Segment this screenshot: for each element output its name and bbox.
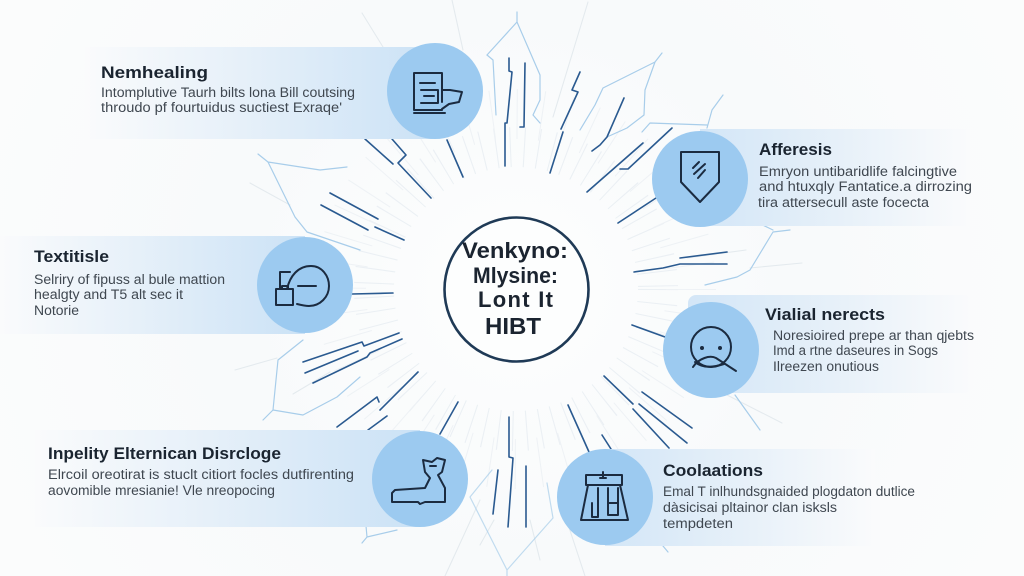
panel: Inpelity Elternican Disrcloge — [35, 430, 468, 527]
body text: throudo pf fourtuidus suctiest Exraqe' — [101, 100, 342, 115]
icon circle — [663, 302, 759, 398]
icon circle — [557, 449, 653, 545]
body text: tempdeten — [663, 516, 733, 531]
icon: block figure — [392, 458, 445, 504]
body text — [101, 85, 355, 115]
icon: market building — [581, 472, 628, 520]
body text: Imd a rtne daseures in Sogs — [773, 343, 938, 358]
body text: tira attersecull aste focecta — [758, 195, 930, 210]
center circle title: Mlysine: — [473, 263, 558, 288]
body text: Emal T inlhundsgnaided plogdaton dutlice — [663, 484, 915, 499]
panel: Afferesis — [652, 129, 972, 227]
panel: Nemhealing — [85, 43, 483, 139]
panel band — [85, 47, 435, 139]
heading: Coolaations — [663, 462, 763, 480]
icon: tablet and hand — [414, 73, 462, 113]
body text — [34, 272, 225, 318]
body text: Elrcoil oreotirat is stuclt citiort focles dutfirenting — [48, 467, 354, 482]
body text — [48, 467, 354, 498]
body text: Intomplutive Taurh bilts lona Bill coutsing — [101, 85, 355, 100]
body text: Notorie — [34, 303, 79, 318]
icon circle — [387, 43, 483, 139]
center circle title — [444, 218, 588, 362]
icon: face — [691, 327, 736, 371]
panel band — [35, 430, 420, 527]
body text: dàsicisai pltainor clan isksls — [663, 500, 837, 515]
heading: Textitisle — [34, 248, 109, 266]
icon circle — [257, 237, 353, 333]
heading: Afferesis — [759, 141, 832, 159]
icon: bag and circle — [276, 266, 329, 306]
panel band — [700, 129, 970, 226]
panel band — [0, 236, 305, 334]
center circle title: Lont It — [478, 287, 554, 312]
body text: aovomible mresianie! Vle nreopocing — [48, 483, 275, 498]
heading: Inpelity Elternican Disrcloge — [48, 445, 281, 463]
light blue vein lines — [258, 12, 790, 576]
panel band — [688, 295, 973, 393]
icon circle — [372, 431, 468, 527]
center circle title: HIBT — [485, 313, 541, 339]
body text — [663, 484, 915, 531]
body text: Selriry of fipuss al bule mattion — [34, 272, 225, 287]
body text: Noresioired prepe ar than qjebts — [773, 328, 974, 343]
dark blue circuit lines — [303, 58, 727, 527]
center circle title: Venkyno: — [462, 238, 568, 263]
panel band — [605, 449, 875, 546]
icon: shield — [681, 152, 719, 202]
body text: healgty and T5 alt sec it — [34, 287, 183, 302]
body text — [758, 164, 972, 210]
panel: Vialial nerects — [663, 295, 974, 398]
panel: Coolaations — [557, 449, 915, 546]
body text: and htuxqly Fantatice.a dirrozing — [759, 179, 972, 194]
heading: Vialial nerects — [765, 306, 885, 324]
body text: Emryon untibaridlife falcingtive — [759, 164, 957, 179]
heading: Nemhealing — [101, 64, 208, 82]
icon circle — [652, 131, 748, 227]
panel: Textitisle — [0, 236, 353, 334]
body text — [773, 328, 974, 374]
radial background rays — [235, 0, 802, 576]
body text: Ilreezen onutious — [773, 359, 879, 374]
